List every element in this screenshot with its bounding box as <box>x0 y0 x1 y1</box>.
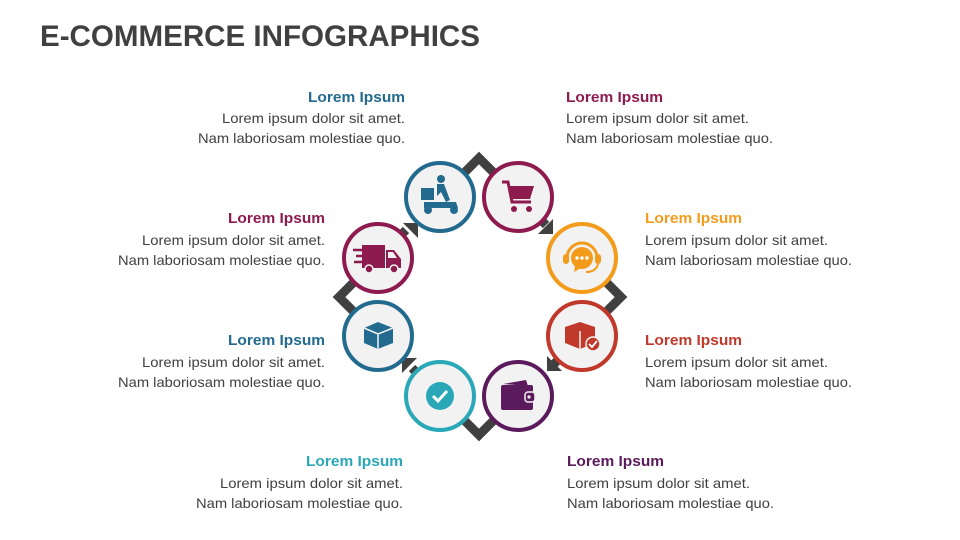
connectors <box>339 158 621 435</box>
circle: truck <box>344 224 412 292</box>
text: bottom-left: Nam laboriosam molestiae quo. <box>196 495 403 511</box>
text: right lower: Nam laboriosam molestiae quo. <box>645 374 852 390</box>
circle: wallet <box>484 362 552 430</box>
title: E-COMMERCE INFOGRAPHICS <box>40 20 480 53</box>
circle: headset <box>548 224 616 292</box>
text: right upper: Lorem ipsum dolor sit amet. <box>645 232 828 248</box>
text: bottom-right: Lorem Ipsum <box>567 453 664 470</box>
text: bottom-right <box>567 453 774 511</box>
circle: box <box>344 302 412 370</box>
text: bottom-right: Nam laboriosam molestiae quo. <box>567 495 774 511</box>
text: bottom-right: Lorem ipsum dolor sit amet. <box>567 475 750 491</box>
circle: scooter <box>406 163 474 231</box>
text: left upper: Lorem ipsum dolor sit amet. <box>142 232 325 248</box>
text: top-left: Lorem ipsum dolor sit amet. <box>222 110 405 126</box>
text: top-left: Nam laboriosam molestiae quo. <box>198 130 405 146</box>
text: right upper: Nam laboriosam molestiae quo. <box>645 252 852 268</box>
text: top-left <box>198 89 405 146</box>
text: bottom-left: Lorem ipsum dolor sit amet. <box>220 475 403 491</box>
text: left lower: Nam laboriosam molestiae quo. <box>118 374 325 390</box>
text: right lower: Lorem Ipsum <box>645 332 742 349</box>
text: right lower: Lorem ipsum dolor sit amet. <box>645 354 828 370</box>
circle: check <box>406 362 474 430</box>
text: top-left: Lorem Ipsum <box>308 89 405 106</box>
text: bottom-left <box>196 453 403 511</box>
circle: cart <box>484 163 552 231</box>
text: left upper: Lorem Ipsum <box>228 210 325 227</box>
text: top-right <box>566 89 773 146</box>
text: right lower <box>645 332 852 390</box>
text: left upper <box>118 210 325 268</box>
text: left lower: Lorem Ipsum <box>228 332 325 349</box>
text: right upper <box>645 210 852 268</box>
circle: box check <box>548 302 616 370</box>
arrowheads <box>402 219 562 373</box>
text: left lower <box>118 332 325 390</box>
text: top-right: Lorem ipsum dolor sit amet. <box>566 110 749 126</box>
text: left upper: Nam laboriosam molestiae quo. <box>118 252 325 268</box>
text: right upper: Lorem Ipsum <box>645 210 742 227</box>
text: left lower: Lorem ipsum dolor sit amet. <box>142 354 325 370</box>
text: top-right: Nam laboriosam molestiae quo. <box>566 130 773 146</box>
text: top-right: Lorem Ipsum <box>566 89 663 106</box>
text: bottom-left: Lorem Ipsum <box>306 453 403 470</box>
